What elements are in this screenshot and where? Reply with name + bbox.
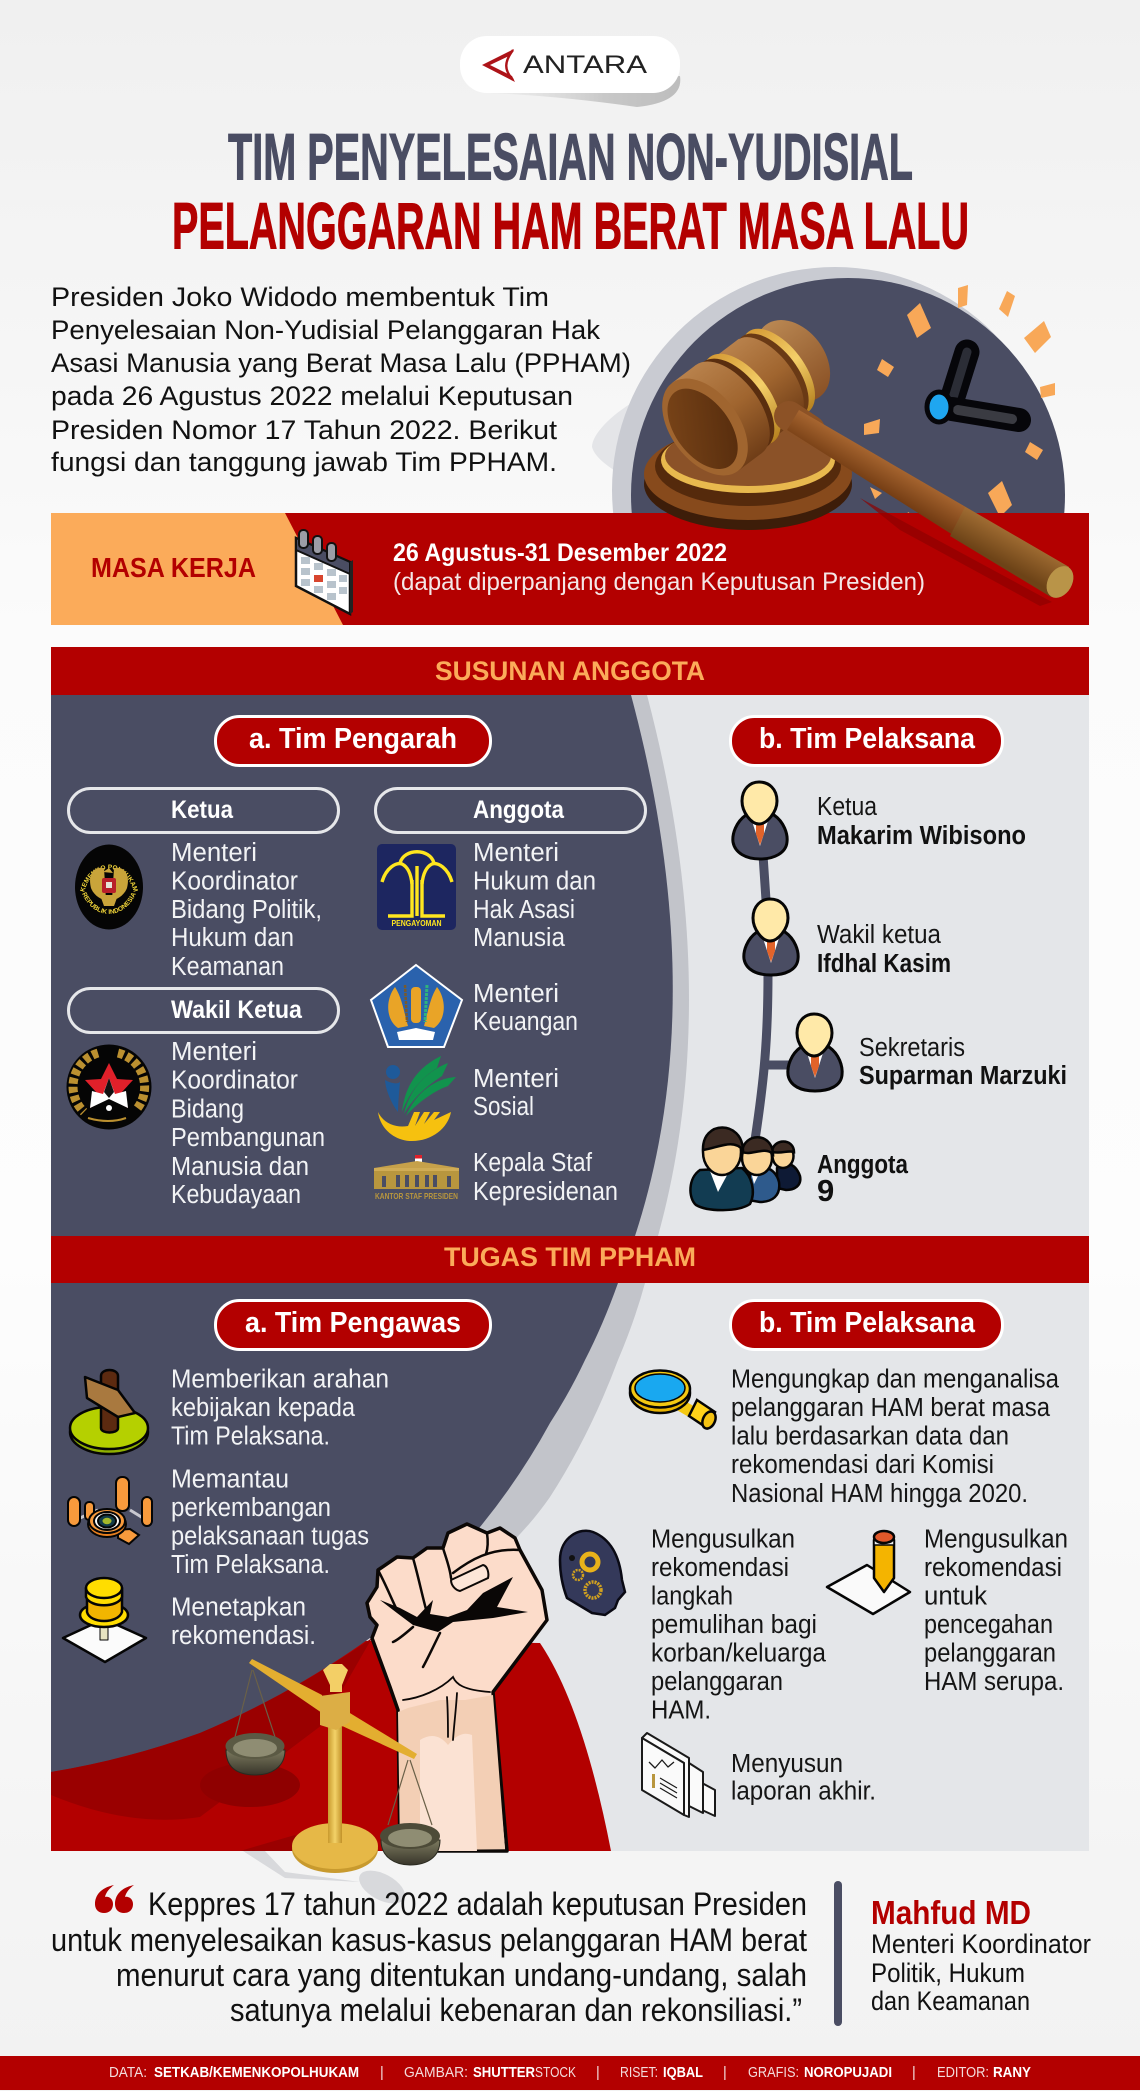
- label: ketua: [817, 793, 1026, 850]
- connector line: [755, 855, 792, 1140]
- footer bar: GAMBAR:: [404, 2065, 468, 2081]
- footer bar: SETKAB/KEMENKOPOLHUKAM: [154, 2065, 359, 2081]
- band: masa kerja: [51, 513, 1089, 625]
- pill: tim pengawas: a. Tim Pengawas: [245, 1307, 461, 1339]
- attribution: Politik, Hukum: [871, 1958, 1025, 1988]
- text: memantau: Memantau: [171, 1466, 289, 1494]
- label: sekretaris: Sekretaris: [859, 1034, 965, 1062]
- text: menko polhukam: Bidang Politik,: [171, 896, 322, 924]
- text: mengungkap: rekomendasi dari Komisi: [731, 1451, 994, 1479]
- text: pemulihan: HAM.: [651, 1696, 711, 1724]
- logo: kemenko polhukam: KEMENKO POLHUKAM: [80, 864, 138, 892]
- intro text: fungsi dan tanggung jawab Tim PPHAM.: [51, 447, 557, 477]
- text: menko pmk: [171, 1038, 325, 1209]
- icon: group of members: [690, 1128, 800, 1210]
- text: menkumham: Menteri: [473, 839, 559, 867]
- text: menko polhukam: Keamanan: [171, 953, 284, 981]
- text: menko polhukam: Hukum dan: [171, 924, 294, 952]
- text: mengungkap: lalu berdasarkan data dan: [731, 1422, 1009, 1450]
- label: anggota: [817, 1151, 909, 1208]
- footer bar: |: [380, 2065, 384, 2081]
- dates: (dapat diperpanjang dengan Keputusan Presiden): [393, 568, 925, 596]
- text: mengungkap: Nasional HAM hingga 2020.: [731, 1480, 1028, 1508]
- text: menetapkan: Menetapkan: [171, 1594, 306, 1622]
- text: pemulihan: korban/keluarga: [651, 1640, 827, 1668]
- person: wakil ketua: [744, 899, 798, 975]
- pill: wakil ketua: [68, 988, 338, 1032]
- logo: kantor staf presiden: KANTOR STAF PRESIDEN: [375, 1191, 458, 1201]
- label: sekretaris: Suparman Marzuki: [859, 1062, 1067, 1090]
- text: menetapkan: [171, 1594, 316, 1650]
- footer bar: EDITOR:: [937, 2065, 989, 2081]
- text: ksp: Kepresidenan: [473, 1178, 618, 1206]
- text: mengungkap: [731, 1366, 1060, 1508]
- text: mensos: Menteri: [473, 1065, 559, 1093]
- logo: kemenkeu: [371, 965, 462, 1047]
- text: pencegahan: rekomendasi: [924, 1554, 1062, 1582]
- label: ketua: Ketua: [817, 793, 878, 821]
- label: wakil ketua: Ifdhal Kasim: [817, 950, 951, 978]
- logo: ANTARA: ANTARA: [523, 51, 647, 79]
- pill: tim pengarah: a. Tim Pengarah: [249, 723, 457, 755]
- intro text: Asasi Manusia yang Berat Masa Lalu (PPHAM): [51, 348, 631, 378]
- text: memantau: [171, 1466, 369, 1579]
- text: memantau: perkembangan: [171, 1494, 331, 1522]
- intro text: Penyelesaian Non-Yudisial Pelanggaran Hak: [51, 315, 601, 345]
- text: pencegahan: [924, 1526, 1068, 1696]
- quote mark: [95, 1885, 134, 1913]
- clock ticks: [864, 285, 1055, 528]
- footer bar: IQBAL: [663, 2065, 703, 2081]
- text: pencegahan: untuk: [924, 1582, 987, 1610]
- text: arahan: Tim Pelaksana.: [171, 1422, 330, 1450]
- text: mengungkap: Mengungkap dan menganalisa: [731, 1366, 1060, 1394]
- text: memantau: Tim Pelaksana.: [171, 1551, 330, 1579]
- label: anggota: 9: [817, 1173, 834, 1208]
- text: menkumham: [473, 839, 596, 952]
- label: masa kerja: MASA KERJA: [91, 552, 256, 583]
- text: pencegahan: Mengusulkan: [924, 1526, 1068, 1554]
- text: menko polhukam: [171, 839, 322, 981]
- text: pemulihan: rekomendasi: [651, 1554, 789, 1582]
- text: menkumham: Manusia: [473, 924, 566, 952]
- label: ketua: Makarim Wibisono: [817, 822, 1026, 850]
- panel: susunan anggota: [51, 695, 1089, 1236]
- pill: anggota: Anggota: [473, 796, 565, 824]
- text: menkeu: Menteri: [473, 980, 559, 1008]
- quote text: satunya melalui kebenaran dan rekonsiliasi.”: [230, 1992, 802, 2028]
- quote text: Keppres 17 tahun 2022 adalah keputusan Presiden: [148, 1886, 807, 1922]
- label: wakil ketua: Wakil ketua: [817, 921, 942, 949]
- clock hands: [927, 352, 1019, 422]
- icon: pencil on paper: [827, 1531, 910, 1614]
- text: arahan: [171, 1366, 389, 1450]
- text: ksp: [473, 1149, 618, 1206]
- text: mensos: Sosial: [473, 1093, 534, 1121]
- pill: tim pelaksana tugas: b. Tim Pelaksana: [759, 1307, 976, 1339]
- text: laporan akhir: [731, 1750, 876, 1806]
- label: sekretaris: [859, 1034, 1067, 1090]
- attribution: Menteri Koordinator: [871, 1929, 1091, 1959]
- section header: tugas tim pepham: TUGAS TIM PPHAM: [444, 1242, 696, 1272]
- title: [172, 120, 969, 262]
- pill: wakil ketua: Wakil Ketua: [171, 996, 303, 1024]
- text: mensos: [473, 1065, 559, 1121]
- text: pemulihan: langkah: [651, 1582, 733, 1610]
- text: menko pmk: Menteri: [171, 1038, 257, 1066]
- pill: tim pengarah: [216, 716, 490, 766]
- text: arahan: Memberikan arahan: [171, 1366, 389, 1394]
- person: ketua: [733, 782, 787, 859]
- intro text: [51, 282, 631, 477]
- pill: tim pelaksana: b. Tim Pelaksana: [759, 723, 976, 755]
- clock circle: [592, 267, 1065, 513]
- text: menko pmk: Koordinator: [171, 1066, 298, 1094]
- dates: [393, 539, 925, 596]
- footer bar: |: [912, 2065, 916, 2081]
- text: menko pmk: Pembangunan: [171, 1124, 325, 1152]
- intro text: Presiden Joko Widodo membentuk Tim: [51, 282, 549, 312]
- pill: ketua: [68, 788, 338, 832]
- section header: susunan anggota: SUSUNAN ANGGOTA: [435, 656, 705, 686]
- footer bar: [0, 2056, 1140, 2090]
- section header: susunan anggota: [51, 647, 1089, 695]
- panel: tugas: [51, 1283, 1089, 1851]
- shadow: scale on background: [243, 1851, 410, 1910]
- quote text: untuk menyelesaikan kasus-kasus pelanggaran HAM berat: [51, 1922, 807, 1958]
- text: menkumham: Hak Asasi: [473, 896, 575, 924]
- footer bar: DATA:: [109, 2065, 147, 2081]
- pill: tim pelaksana tugas: [730, 1300, 1002, 1350]
- footer bar: |: [596, 2065, 600, 2081]
- text: menko polhukam: Koordinator: [171, 868, 298, 896]
- icon: calendar: [296, 530, 353, 614]
- logo: kemenko pmk: [66, 1044, 152, 1130]
- icon: push button: [63, 1578, 146, 1662]
- text: laporan akhir: Menyusun: [731, 1750, 843, 1778]
- text: menkeu: Keuangan: [473, 1008, 578, 1036]
- logo: kemenkumham: [377, 844, 456, 930]
- intro text: Presiden Nomor 17 Tahun 2022. Berikut: [51, 415, 558, 445]
- text: menkeu: [473, 980, 578, 1036]
- pill: anggota: [376, 788, 646, 832]
- logo: kemenko polhukam: REPUBLIK INDONESIA: [82, 892, 136, 914]
- logo: ANTARA: [460, 36, 680, 107]
- attribution: dan Keamanan: [871, 1986, 1030, 2016]
- footer bar: RISET:: [620, 2065, 658, 2081]
- text: pemulihan: pemulihan bagi: [651, 1611, 817, 1639]
- illustration: scales of justice: [226, 1659, 440, 1873]
- intro text: pada 26 Agustus 2022 melalui Keputusan: [51, 381, 573, 411]
- footer bar: |: [723, 2065, 727, 2081]
- footer bar: GRAFIS:: [748, 2065, 799, 2081]
- text: arahan: kebijakan kepada: [171, 1394, 356, 1422]
- dates: 26 Agustus-31 Desember 2022: [393, 539, 727, 567]
- icon: signpost: [70, 1370, 148, 1454]
- footer bar: NOROPUJADI: [804, 2065, 892, 2081]
- text: mengungkap: pelanggaran HAM berat masa: [731, 1394, 1051, 1422]
- text: menko pmk: Kebudayaan: [171, 1181, 301, 1209]
- divider bar: [834, 1881, 842, 2026]
- text: memantau: pelaksanaan tugas: [171, 1522, 369, 1550]
- text: laporan akhir: laporan akhir.: [731, 1778, 876, 1806]
- logo: kemenkumham: PENGAYOMAN: [392, 919, 442, 928]
- text: menko pmk: Manusia dan: [171, 1153, 309, 1181]
- text: menko polhukam: Menteri: [171, 839, 257, 867]
- pill: tim pengawas: [216, 1300, 490, 1350]
- pill: tim pelaksana: [730, 716, 1002, 766]
- attribution: Mahfud MD: [871, 1894, 1031, 1931]
- footer bar: RANY: [993, 2065, 1031, 2081]
- icon: gavel: [644, 298, 1079, 606]
- section header: tugas tim pepham: [51, 1236, 1089, 1283]
- person: sekretaris: [788, 1014, 842, 1091]
- icon: magnifier: [630, 1370, 718, 1431]
- label: anggota: Anggota: [817, 1151, 909, 1179]
- text: pencegahan: pencegahan: [924, 1611, 1053, 1639]
- logo: kemenko polhukam: [75, 844, 143, 930]
- text: pemulihan: [651, 1526, 827, 1724]
- pill: ketua: Ketua: [171, 796, 234, 824]
- attribution: [871, 1894, 1091, 2016]
- text: menetapkan: rekomendasi.: [171, 1622, 316, 1650]
- text: pencegahan: HAM serupa.: [924, 1668, 1064, 1696]
- icon: head with gears: [560, 1531, 625, 1615]
- text: menko pmk: Bidang: [171, 1096, 244, 1124]
- quote text: menurut cara yang ditentukan undang-undang, salah: [116, 1957, 807, 1993]
- label: wakil ketua: [817, 921, 951, 978]
- logo: kemensos: [378, 1056, 456, 1141]
- text: menkumham: Hukum dan: [473, 868, 596, 896]
- footer bar: STOCK: [535, 2065, 576, 2081]
- footer bar: SHUTTER: [473, 2065, 535, 2081]
- logo: kantor staf presiden: [374, 1155, 459, 1201]
- icon: turret: [68, 1477, 152, 1544]
- quote text: [51, 1886, 807, 2028]
- text: pemulihan: Mengusulkan: [651, 1526, 795, 1554]
- illustration: raised fist: [367, 1524, 547, 1851]
- text: pencegahan: pelanggaran: [924, 1640, 1056, 1668]
- icon: documents: [642, 1733, 715, 1817]
- text: pemulihan: pelanggaran: [651, 1668, 783, 1696]
- text: ksp: Kepala Staf: [473, 1149, 593, 1177]
